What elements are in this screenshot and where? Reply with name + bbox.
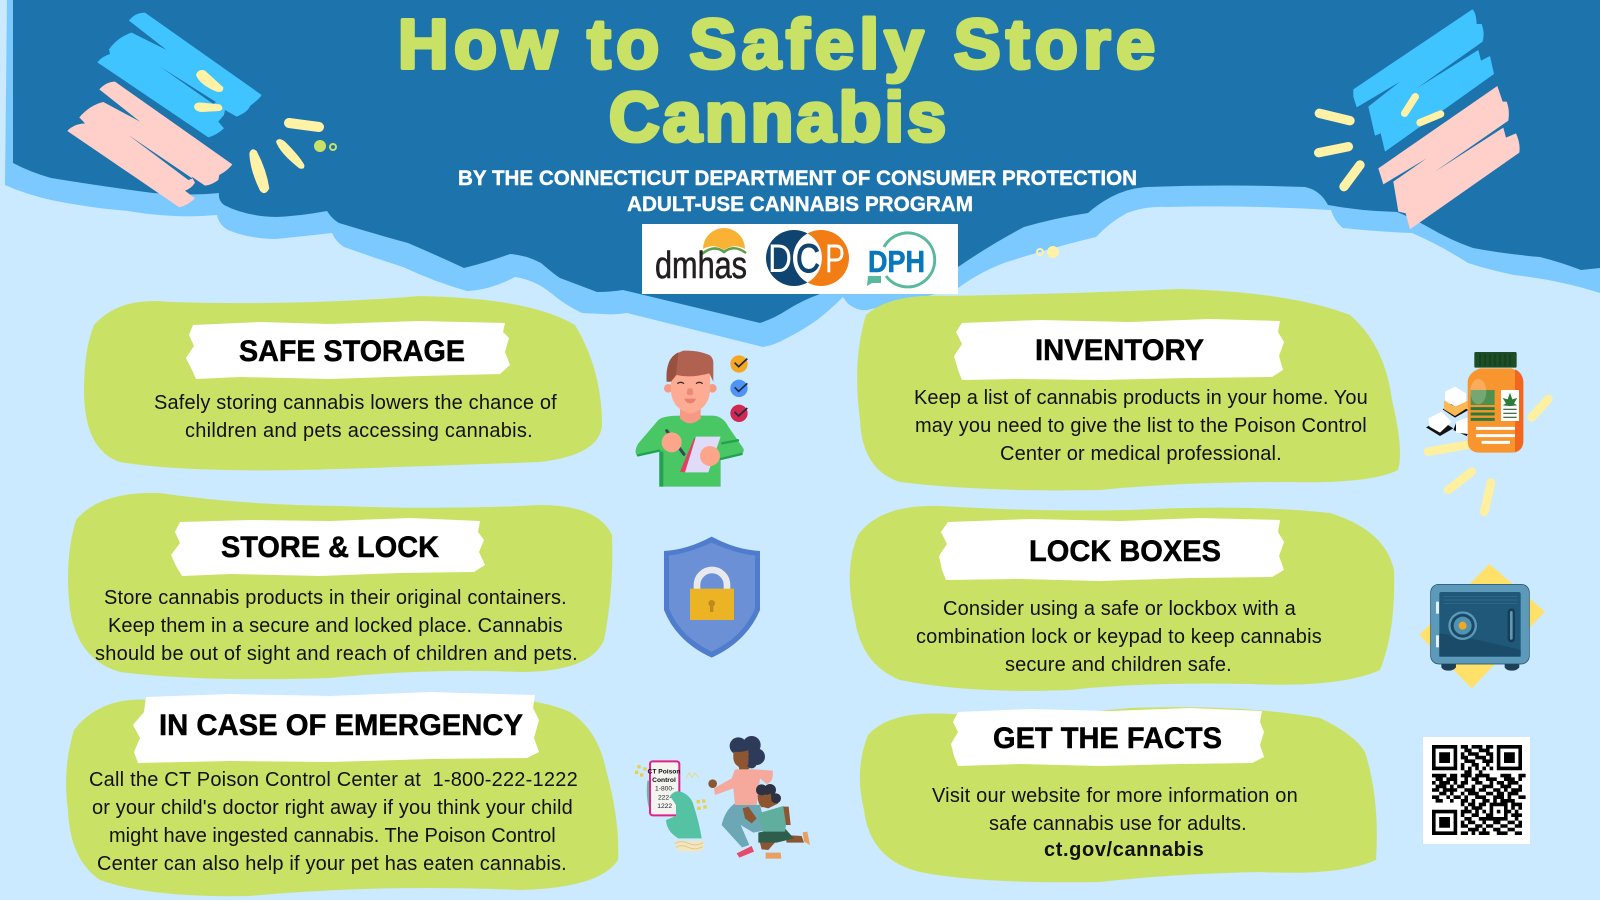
icon: safe xyxy=(1419,564,1545,688)
phone in hand: Control xyxy=(652,777,676,784)
icon: medicine bottle xyxy=(1426,352,1548,512)
body text: or your child's doctor right away if you think your child xyxy=(92,797,573,819)
logo: DPH xyxy=(867,233,935,287)
body text xyxy=(95,587,578,665)
heading: GET THE FACTS xyxy=(993,722,1222,755)
phone in hand: 222- xyxy=(658,794,671,801)
body text: Call the CT Poison Control Center at 1-800-222-1222 xyxy=(89,769,578,791)
title: Cannabis xyxy=(609,78,946,156)
subtitle: ADULT-USE CANNABIS PROGRAM xyxy=(627,193,973,216)
heading: SAFE STORAGE xyxy=(239,335,465,368)
icon: shield with padlock xyxy=(664,537,760,658)
panel: store and lock xyxy=(68,493,612,679)
icon: person with checklist xyxy=(636,351,748,487)
panel: safe storage xyxy=(84,296,602,470)
blob xyxy=(860,707,1377,882)
heading tag xyxy=(186,321,510,379)
blob xyxy=(84,296,602,470)
title xyxy=(398,5,1155,156)
blob xyxy=(68,493,612,679)
body text: Keep them in a secure and locked place. Cannabis xyxy=(108,615,563,637)
panel: lock boxes xyxy=(850,506,1394,691)
subtitle: BY THE CONNECTICUT DEPARTMENT OF CONSUMER PROTECTION xyxy=(458,167,1137,190)
body text: Safely storing cannabis lowers the chance of xyxy=(154,392,557,414)
heading tag xyxy=(939,518,1284,581)
panel: get the facts xyxy=(860,707,1377,882)
cubes xyxy=(1426,387,1472,436)
panel: inventory xyxy=(857,289,1400,490)
subtitle xyxy=(458,167,1137,216)
body text: Store cannabis products in their original containers. xyxy=(104,587,567,609)
body text xyxy=(154,392,557,442)
logo: DCP: D xyxy=(768,237,792,281)
bottle body xyxy=(1468,352,1523,453)
heading: INVENTORY xyxy=(1035,334,1204,367)
body text: may you need to give the list to the Poison Control xyxy=(915,415,1367,437)
body text: ct.gov/cannabis xyxy=(1044,839,1204,861)
body text: should be out of sight and reach of children and pets. xyxy=(95,643,578,665)
adult xyxy=(708,736,773,858)
body text xyxy=(916,598,1322,676)
header wave: light band xyxy=(5,0,1600,347)
decoration: left scribble xyxy=(67,13,336,207)
logo: dmhas: dmhas xyxy=(655,245,747,287)
body text: Center can also help if your pet has eaten cannabis. xyxy=(97,853,567,875)
body text: Keep a list of cannabis products in your home. You xyxy=(914,387,1368,409)
heading tag xyxy=(171,518,485,576)
body text xyxy=(89,769,578,875)
phone in hand: 1222 xyxy=(657,803,672,810)
body text: combination lock or keypad to keep cannabis xyxy=(916,626,1322,648)
phone in hand xyxy=(635,761,707,852)
blob xyxy=(857,289,1400,490)
heading tag xyxy=(133,692,539,763)
logo: DCP xyxy=(766,230,849,286)
logos xyxy=(642,224,958,294)
logo: dmhas xyxy=(655,228,747,287)
title: How to Safely Store xyxy=(398,5,1155,83)
phone in hand: CT Poison xyxy=(648,768,680,775)
logo: DCP: P xyxy=(825,237,845,281)
logo: DPH: DPH xyxy=(868,244,925,279)
panel: in case of emergency xyxy=(66,692,618,896)
body text xyxy=(914,387,1368,465)
header wave: dark blue xyxy=(13,0,1600,323)
body text: secure and children safe. xyxy=(1005,654,1232,676)
body text: safe cannabis use for adults. xyxy=(989,813,1247,835)
heading: LOCK BOXES xyxy=(1029,535,1221,568)
decoration: yellow dots xyxy=(1037,246,1059,258)
icon: family running with phone xyxy=(635,736,810,859)
body text: Visit our website for more information on xyxy=(932,785,1298,807)
blob xyxy=(66,697,618,896)
QR code xyxy=(1423,737,1530,844)
heading tag xyxy=(954,319,1284,380)
blob xyxy=(850,506,1394,691)
body text: Consider using a safe or lockbox with a xyxy=(943,598,1297,620)
body text: children and pets accessing cannabis. xyxy=(185,420,533,442)
body text xyxy=(932,785,1298,861)
logo: DCP: C xyxy=(796,237,820,281)
heading: IN CASE OF EMERGENCY xyxy=(159,709,523,742)
decoration: right scribble xyxy=(1319,9,1520,229)
phone in hand: 1-800- xyxy=(655,785,674,792)
child xyxy=(743,784,810,859)
heading tag xyxy=(951,708,1264,766)
body text: might have ingested cannabis. The Poison Control xyxy=(109,825,556,847)
heading: STORE & LOCK xyxy=(221,531,439,564)
body text: Center or medical professional. xyxy=(1000,443,1282,465)
